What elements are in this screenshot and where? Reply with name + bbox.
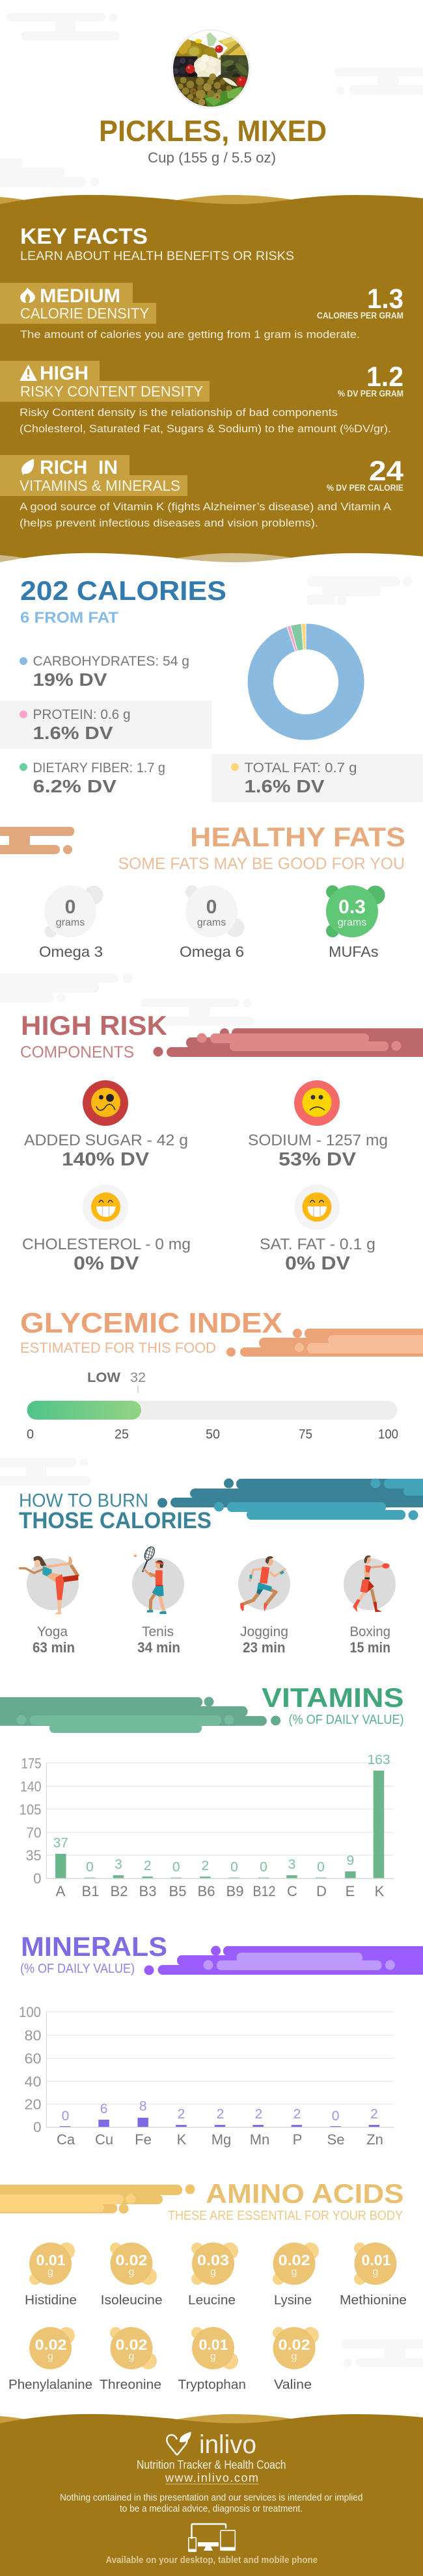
activity: yoga: 63 min (33, 1639, 75, 1656)
stat: histidine: g (48, 2267, 53, 2278)
chart: vitamins bars: 2 (202, 1858, 209, 1873)
heading: those calories: THOSE CALORIES (19, 1508, 212, 1533)
activity: boxing (344, 1555, 396, 1656)
legend: total fat: 1.6% DV (245, 776, 325, 796)
chart: minerals bars: K (177, 2131, 187, 2148)
chart: minerals bars: 100 (19, 2004, 41, 2020)
chart: minerals bars (19, 2004, 394, 2148)
chart: minerals bars: 80 (25, 2027, 42, 2044)
stat: methionine (340, 2243, 407, 2308)
heading: vitamins: VITAMINS (262, 1682, 403, 1713)
chart: vitamins bars: 175 (21, 1755, 42, 1772)
chart: vitamins bars: B5 (169, 1883, 186, 1899)
availability note: Available on your desktop, tablet and mobile phone (105, 2555, 318, 2566)
stat: saturated fat (260, 1184, 375, 1274)
chart: vitamins bars: B1 (82, 1883, 99, 1899)
chart: vitamins bars: 2 (144, 1858, 152, 1873)
activity: boxing: 15 min (350, 1639, 390, 1656)
stat: isoleucine: Isoleucine (101, 2293, 163, 2308)
stat: phenylalanine: 0.02 (35, 2336, 66, 2353)
chart: minerals bars: Mn (250, 2131, 269, 2148)
chart: vitamins bars: 37 (53, 1836, 68, 1851)
stat: isoleucine: 0.02 (116, 2252, 147, 2269)
subheading: daily value: (% OF DAILY VALUE) (20, 1962, 135, 1976)
legend: protein (0, 701, 212, 749)
stat: methionine: Methionine (340, 2293, 407, 2308)
icon: devices (188, 2524, 236, 2552)
chart: minerals bars: Zn (366, 2131, 383, 2148)
stat: omega 6 (180, 885, 245, 960)
chart: minerals bars: 0 (332, 2109, 339, 2124)
chart: vitamins bars: 9 (347, 1853, 354, 1868)
stat: leucine: g (210, 2267, 216, 2278)
stat: added sugar: ADDED SUGAR - 42 g (24, 1132, 188, 1149)
chart: vitamins bars: 0 (172, 1860, 180, 1875)
chart: minerals bars: 0 (33, 2119, 42, 2135)
heading: calories: 202 CALORIES (20, 575, 226, 606)
stat: tryptophan (178, 2327, 246, 2392)
chart: minerals bars: 0 (62, 2109, 69, 2124)
heading: key facts: KEY FACTS (20, 224, 148, 249)
stat: phenylalanine (8, 2327, 92, 2392)
decoration: green stripes (0, 1697, 280, 1733)
panel: high risk (20, 1010, 423, 1274)
chart: vitamins bars: 140 (20, 1778, 42, 1795)
stat: sodium (248, 1080, 388, 1170)
chart: minerals bars: 6 (100, 2101, 107, 2116)
chart: vitamins bars: 70 (26, 1825, 42, 1841)
stat: threonine (100, 2327, 161, 2392)
stat: omega 6: 0 (206, 896, 217, 918)
heading: how to burn: HOW TO BURN (19, 1490, 148, 1511)
fact: risky content density: HIGH (40, 363, 89, 384)
stat: threonine: 0.02 (116, 2336, 147, 2353)
fact: vitamins and minerals: 24 (369, 456, 403, 487)
fact: vitamins and minerals (0, 455, 403, 529)
stat: mufas (326, 885, 385, 960)
heading: minerals: MINERALS (21, 1931, 167, 1962)
chart: minerals bars: 2 (255, 2107, 262, 2122)
stat: phenylalanine: Phenylalanine (8, 2378, 92, 2392)
stat: cholesterol (22, 1184, 191, 1274)
stat: lysine: Lysine (274, 2293, 312, 2308)
chart: vitamins bars: E (346, 1883, 355, 1899)
subheading: components: COMPONENTS (20, 1043, 134, 1061)
chart: minerals bars: 20 (25, 2096, 42, 2113)
chart: minerals bars: P (293, 2131, 302, 2148)
chart: minerals bars: 2 (293, 2107, 301, 2122)
chart: minerals bars: 8 (139, 2099, 147, 2114)
stat: valine: 0.02 (279, 2336, 310, 2353)
chart: vitamins bars: 105 (20, 1802, 42, 1817)
decoration: orange stripes (226, 1329, 423, 1357)
stat: omega 3: Omega 3 (39, 943, 103, 960)
chart: minerals bars: Fe (135, 2131, 152, 2148)
chart: vitamins bars: B12 (252, 1883, 276, 1899)
stat: omega 3: grams (56, 917, 85, 928)
stat: omega 6: Omega 6 (180, 943, 244, 960)
fact: risky content density: % DV PER GRAM (338, 389, 403, 398)
subtitle: serving size: Cup (155 g / 5.5 oz) (148, 150, 276, 166)
fact: calorie density: 1.3 (367, 283, 403, 315)
activity: tennis (132, 1546, 184, 1656)
fact: risky content density: 1.2 (366, 361, 403, 393)
legend: carbohydrates (20, 654, 189, 690)
stat: valine: g (292, 2351, 297, 2362)
stat: valine: Valine (274, 2378, 312, 2392)
fact: risky content density: Risky Content density is the relationship of bad components (20, 406, 338, 419)
legend: carbohydrates: 19% DV (33, 670, 107, 690)
chart: vitamins bars: 35 (26, 1847, 42, 1864)
stat: lysine: 0.02 (279, 2252, 310, 2269)
stat: lysine (273, 2243, 319, 2308)
icon: inlivo heart logo (167, 2432, 191, 2455)
heading: glycemic index: GLYCEMIC INDEX (20, 1307, 282, 1339)
panel: glycemic index (20, 1307, 423, 1442)
decoration: red stripes (154, 1028, 423, 1057)
heading: amino acids: AMINO ACIDS (206, 2178, 403, 2209)
fact: risky content density (0, 361, 403, 435)
fact: vitamins and minerals: A good source of Vitamin K (fights Alzheimer’s disease) and Vitamin A (20, 501, 392, 513)
icon: warning triangle (20, 365, 37, 381)
decoration: yellow stripes (0, 2184, 195, 2214)
panel: healthy fats (0, 822, 405, 960)
decoration: teal stripes (157, 1478, 423, 1520)
subheading: healthy fats: SOME FATS MAY BE GOOD FOR YOU (118, 855, 405, 873)
subheading: essential: THESE ARE ESSENTIAL FOR YOUR BODY (168, 2209, 403, 2223)
stat: sodium: SODIUM - 1257 mg (248, 1132, 388, 1149)
fact: calorie density: MEDIUM (40, 285, 120, 307)
stat: omega 6: grams (197, 917, 226, 928)
chart: vitamins bars: B2 (111, 1883, 128, 1899)
fact: vitamins and minerals: VITAMINS & MINERALS (20, 477, 180, 494)
decoration: peach stripes (0, 827, 74, 854)
stat: saturated fat: 0% DV (285, 1253, 351, 1274)
legend: dietary fiber: DIETARY FIBER: 1.7 g (33, 761, 165, 775)
stat: added sugar: 140% DV (62, 1149, 150, 1170)
activity: tennis: Tenis (142, 1624, 174, 1639)
activity: boxing: Boxing (350, 1624, 390, 1639)
activity: yoga (20, 1556, 79, 1656)
stat: tryptophan: g (210, 2351, 216, 2362)
icon: yoga figure (20, 1556, 78, 1614)
chart: glycemic gauge: 75 (299, 1427, 312, 1442)
stat: omega 3: 0 (65, 896, 75, 918)
legend: total fat: TOTAL FAT: 0.7 g (245, 761, 357, 775)
chart: vitamins bars: 163 (367, 1752, 390, 1767)
stat: omega 3 (39, 885, 103, 960)
panel: how to burn those calories (19, 1478, 423, 1656)
chart: vitamins bars: B3 (139, 1883, 156, 1899)
disclaimer: to be a medical advice, diagnosis or treatment. (120, 2504, 303, 2514)
stat: mufas: grams (338, 917, 366, 928)
chart: vitamins bars: K (375, 1883, 385, 1899)
chart: vitamins bars: B6 (198, 1883, 215, 1899)
fact: calorie density: The amount of calories you are getting from 1 gram is moderate. (20, 328, 360, 341)
activity: jogging: 23 min (243, 1639, 285, 1656)
chart: vitamins bars: 0 (86, 1860, 94, 1875)
heading: high risk: HIGH RISK (21, 1010, 167, 1041)
stat: saturated fat: SAT. FAT - 0.1 g (260, 1236, 375, 1253)
footer (0, 2414, 423, 2576)
chart: glycemic gauge (27, 1370, 398, 1442)
stat: tryptophan: Tryptophan (178, 2378, 246, 2392)
panel: minerals (19, 1931, 423, 2148)
chart: vitamins bars: 0 (33, 1871, 42, 1886)
stat: mufas: MUFAs (329, 943, 379, 960)
icon: food photo (171, 29, 251, 109)
legend: dietary fiber (20, 761, 165, 796)
chart: vitamins bars: B9 (226, 1883, 243, 1899)
chart: minerals bars: 60 (25, 2050, 42, 2067)
title: PICKLES, MIXED (99, 114, 327, 148)
activity: jogging (238, 1556, 290, 1656)
heading: healthy fats: HEALTHY FATS (190, 822, 405, 852)
chart: vitamins bars: D (316, 1883, 327, 1899)
stat: methionine: g (373, 2267, 378, 2278)
chart: vitamins bars: A (56, 1883, 66, 1899)
chart: vitamins bars: 0 (317, 1860, 325, 1875)
stat: tryptophan: 0.01 (199, 2336, 228, 2353)
website link: www.inlivo.com (165, 2471, 258, 2484)
chart: vitamins bars: C (287, 1883, 297, 1899)
panel: amino acids (0, 2178, 407, 2392)
fact: calorie density: CALORIE DENSITY (20, 305, 149, 322)
logo text: inlivo (199, 2430, 256, 2459)
stat: leucine: 0.03 (197, 2252, 229, 2269)
chart: minerals bars: 2 (217, 2107, 224, 2122)
subheading: daily value: (% OF DAILY VALUE) (289, 1713, 403, 1727)
chart: vitamins bars: 0 (260, 1860, 267, 1875)
stat: histidine (25, 2243, 77, 2308)
stat: leucine (188, 2243, 238, 2308)
stat: methionine: 0.01 (362, 2252, 391, 2269)
legend: dietary fiber: 6.2% DV (33, 776, 116, 796)
stat: isoleucine: g (129, 2267, 134, 2278)
legend: protein: PROTEIN: 0.6 g (33, 707, 130, 722)
activity: yoga: Yoga (37, 1624, 68, 1639)
fact: calorie density: CALORIES PER GRAM (317, 311, 403, 320)
subheading: key facts: LEARN ABOUT HEALTH BENEFITS OR RISKS (20, 249, 294, 263)
disclaimer: Nothing contained in this presentation and our services is intended or implied (60, 2493, 363, 2503)
chart: glycemic gauge: 25 (115, 1427, 129, 1442)
stat: isoleucine (101, 2243, 163, 2308)
icon: jogging figure (240, 1556, 286, 1611)
fact: vitamins and minerals: (helps prevent infectious diseases and vision problems). (20, 517, 318, 529)
stat: mufas: 0.3 (338, 896, 366, 918)
chart: glycemic gauge: 50 (206, 1427, 220, 1442)
stat: threonine: g (129, 2351, 134, 2362)
panel: key facts (0, 195, 423, 576)
icon: flame (20, 287, 35, 303)
chart: minerals bars: 2 (370, 2107, 378, 2122)
panel: calories (0, 575, 423, 802)
fact: vitamins and minerals: % DV PER CALORIE (327, 483, 403, 493)
panel: vitamins (0, 1682, 403, 1899)
chart: glycemic gauge: 0 (27, 1427, 34, 1442)
chart: vitamins bars: 3 (288, 1857, 295, 1872)
chart: minerals bars: Cu (95, 2131, 113, 2148)
stat: valine (273, 2327, 319, 2392)
stat: histidine: Histidine (25, 2293, 77, 2308)
chart: vitamins bars (20, 1752, 394, 1899)
chart: vitamins bars: 3 (115, 1857, 122, 1872)
icon: boxing figure (353, 1555, 390, 1612)
stat: threonine: Threonine (100, 2378, 161, 2392)
stat: added sugar (24, 1080, 188, 1170)
activity: jogging: Jogging (240, 1624, 288, 1639)
stat: leucine: Leucine (188, 2293, 236, 2308)
icon: leaf (21, 459, 34, 475)
decoration: purple stripes (144, 1946, 423, 1975)
chart: glycemic gauge: 100 (378, 1427, 398, 1442)
subheading: estimated: ESTIMATED FOR THIS FOOD (20, 1340, 216, 1356)
stat: lysine: g (292, 2267, 297, 2278)
chart: minerals bars: 2 (178, 2107, 185, 2122)
stat: sodium: 53% DV (279, 1149, 357, 1170)
tagline: Nutrition Tracker & Health Coach (137, 2458, 286, 2471)
legend: total fat (212, 754, 423, 802)
chart: glycemic gauge: LOW (87, 1370, 120, 1385)
fact: risky content density: RISKY CONTENT DENSITY (20, 383, 203, 400)
icon: tennis figure (134, 1546, 167, 1614)
legend: carbohydrates: CARBOHYDRATES: 54 g (33, 654, 189, 669)
subheading: from fat: 6 FROM FAT (20, 609, 118, 627)
fact: risky content density: (Cholesterol, Saturated Fat, Sugars & Sodium) to the amount (%DV/gr). (20, 423, 391, 435)
stat: histidine: 0.01 (36, 2252, 66, 2269)
chart: calorie donut (247, 623, 364, 740)
stat: phenylalanine: g (48, 2351, 53, 2362)
fact: vitamins and minerals: RICH IN (40, 457, 118, 478)
stat: cholesterol: CHOLESTEROL - 0 mg (22, 1236, 191, 1253)
chart: minerals bars: Se (327, 2131, 344, 2148)
chart: vitamins bars: 0 (230, 1860, 238, 1875)
disclaimer (60, 2493, 363, 2514)
stat: cholesterol: 0% DV (74, 1253, 139, 1274)
chart: minerals bars: Mg (212, 2131, 231, 2148)
activity: tennis: 34 min (137, 1639, 180, 1656)
legend: protein: 1.6% DV (33, 723, 113, 743)
chart: minerals bars: Ca (57, 2131, 75, 2148)
fact: calorie density (0, 283, 403, 341)
chart: glycemic gauge: 32 (130, 1370, 146, 1385)
chart: minerals bars: 40 (25, 2074, 42, 2090)
